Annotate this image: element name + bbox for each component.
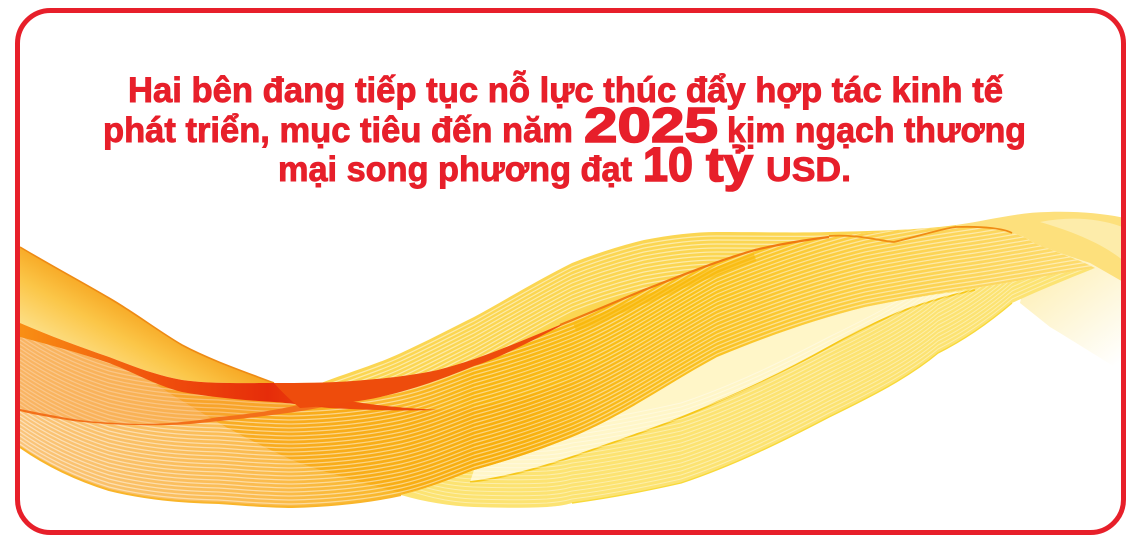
ribbon: red rising strand (274, 320, 572, 408)
upper band stripes (333, 234, 848, 382)
ribbon: fading right tail (1020, 244, 1121, 358)
highlighted value tỷ: tỷ (706, 139, 753, 192)
ribbon: main orange-gold band (20, 227, 1095, 507)
ribbon: orange rising line (560, 237, 829, 325)
headline line 1: Hai bên đang tiếp tục nỗ lực thúc đẩy hợp tác kinh tế (128, 70, 1004, 110)
ribbon: pale band lower edge (572, 303, 1012, 503)
ribbon: lower orange loop (20, 405, 322, 426)
ribbon: wedge top edge (20, 247, 274, 383)
ribbon: pale yellow lower band (401, 268, 1095, 508)
ribbon: lower orange loop fill (20, 337, 310, 425)
headline line 3 start: mại song phương đạt (278, 150, 632, 189)
ribbon: lens edge line (470, 290, 975, 482)
decorative golden wave ribbons (20, 212, 1121, 508)
ribbon: yellow upper band (321, 225, 956, 383)
highlighted year 2025: 2025 (584, 99, 718, 153)
ribbon: top-right lens (956, 212, 1125, 283)
highlighted value 10: 10 (643, 139, 693, 192)
ribbon: bottom edge orange glow (20, 447, 401, 507)
main band stripes (20, 228, 1092, 505)
headline line 2 end: kịm ngạch thương (727, 111, 1026, 150)
headline text (103, 70, 1026, 192)
ribbon: right lens inner highlight (1040, 218, 1121, 258)
pale band stripes (412, 270, 1082, 504)
headline line 2 start: phát triển, mục tiêu đến năm (103, 111, 573, 150)
currency USD: USD. (766, 151, 851, 189)
ribbon: overlapping gold wedge (150, 321, 814, 493)
ribbon: gold glow under rising line (575, 257, 755, 328)
ribbon: top-left orange wedge (20, 247, 274, 383)
ribbon: orange knot at upper right (829, 227, 1012, 242)
ribbon: white-yellow lens (470, 290, 975, 482)
ribbon: red left strand (20, 323, 438, 410)
